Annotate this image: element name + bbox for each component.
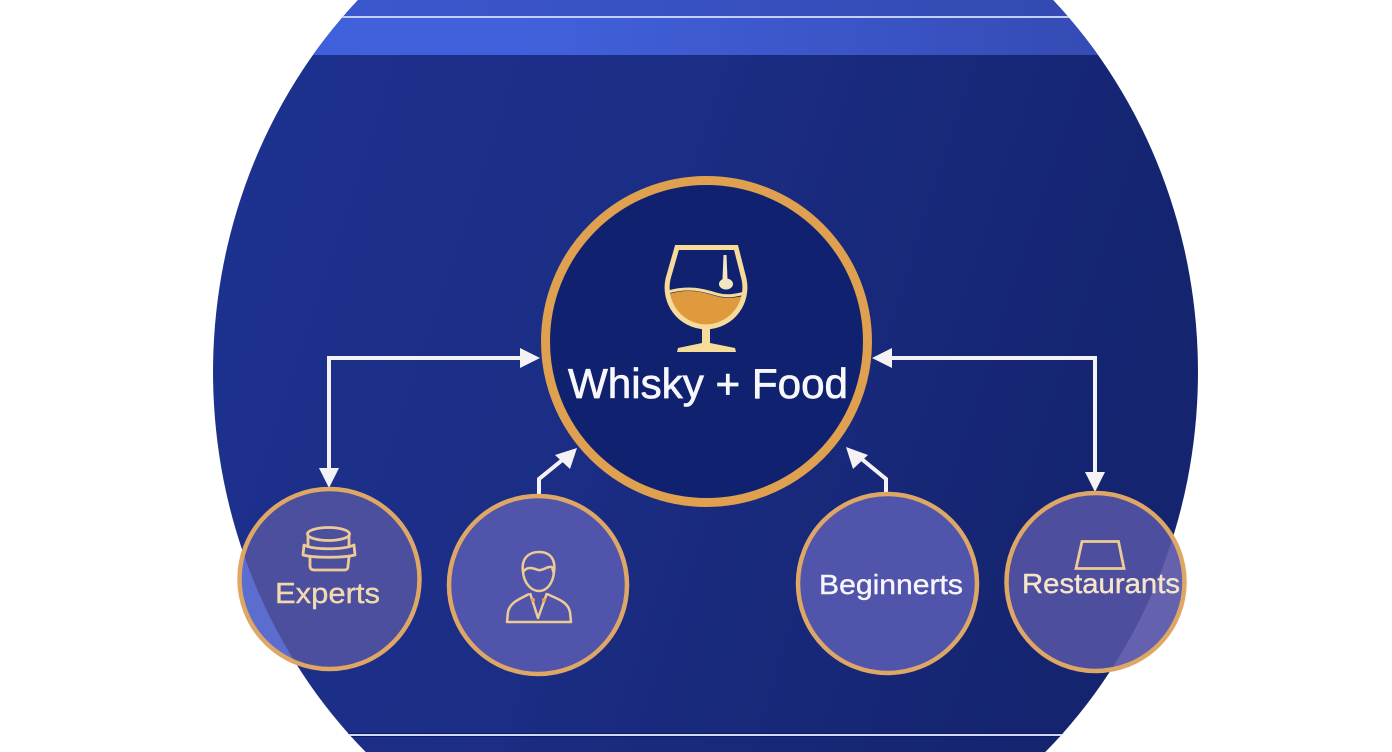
arrow: professional to centre — [539, 448, 577, 495]
infographic: whisky and food audience diagram — [213, 0, 1198, 752]
arrow: restaurants to centre — [872, 348, 1105, 492]
arrow: beginners to centre — [846, 447, 886, 494]
background disc with header and footer bands — [213, 0, 1198, 752]
footer rule — [348, 733, 1063, 737]
arrow: experts to centre — [319, 348, 540, 488]
icon: whisky glass — [667, 248, 745, 352]
node: professional, icon only — [449, 496, 627, 674]
icon: stacked jar — [303, 528, 355, 570]
node: Experts — [237, 486, 422, 672]
central hub: Whisky + Food — [546, 180, 868, 502]
label: Experts — [275, 578, 380, 610]
hub label: Whisky + Food — [568, 360, 848, 407]
label: Beginnerts — [819, 569, 963, 600]
label: Restaurants — [1022, 568, 1180, 599]
header band — [313, 0, 1098, 55]
node: Restaurants — [1004, 490, 1187, 674]
icon: person in suit — [507, 552, 571, 622]
node: Beginners — [798, 494, 977, 673]
icon: table — [1076, 542, 1124, 568]
